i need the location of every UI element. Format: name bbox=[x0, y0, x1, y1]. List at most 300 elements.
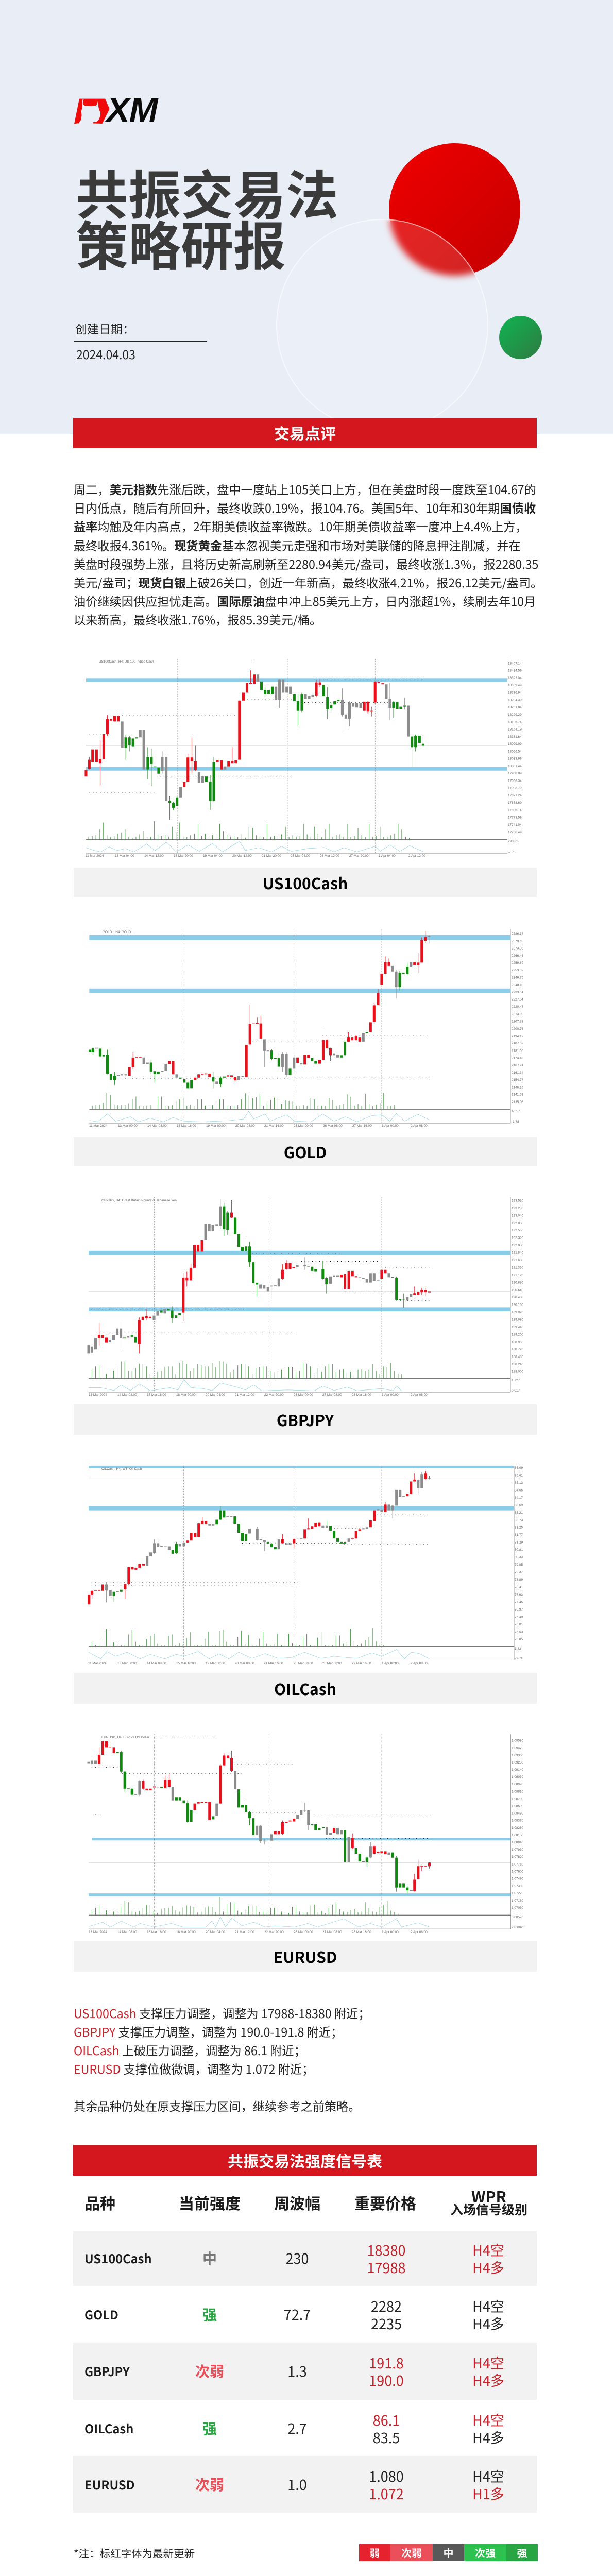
price axis labels: 2135.06 bbox=[512, 1100, 524, 1104]
price axis labels: 191.600 bbox=[512, 1259, 524, 1262]
time axis labels: 21 Mar 16:00 bbox=[264, 1662, 283, 1665]
price axis labels: 0.017 bbox=[512, 1389, 520, 1393]
price axis labels: 1.07160 bbox=[512, 1899, 524, 1903]
decorative red circle bbox=[389, 143, 520, 276]
price axis labels: 1.09360 bbox=[512, 1754, 524, 1757]
row: OILCash: 86.1 bbox=[373, 2410, 400, 2430]
chart title: GOLD_, H4: GOLD_ bbox=[103, 930, 133, 934]
row: US100Cash: 中 bbox=[202, 2248, 217, 2268]
price axis labels: 17773.59 bbox=[508, 816, 522, 820]
time axis labels: 11 Mar 2024 bbox=[88, 1662, 107, 1665]
row: GBPJPY: GBPJPY bbox=[84, 2362, 130, 2380]
price axis labels: 18261.84 bbox=[508, 706, 522, 709]
table header: 周波幅 bbox=[274, 2191, 320, 2214]
price axis labels: 2227.04 bbox=[512, 998, 524, 1002]
time axis labels: 19 Mar 00:00 bbox=[206, 1662, 225, 1665]
row: OILCash: 83.5 bbox=[373, 2427, 400, 2447]
section heading: trade review bbox=[73, 418, 537, 448]
row: OILCash: H4空 bbox=[472, 2410, 504, 2430]
time axis labels: 15 Mar 16:00 bbox=[177, 1124, 196, 1128]
row: OILCash: 2.7 bbox=[287, 2418, 307, 2438]
row: US100Cash: H4多 bbox=[472, 2257, 504, 2277]
strength legend bbox=[359, 2544, 538, 2561]
price axis labels: 80.33 bbox=[515, 1556, 523, 1560]
time axis labels: 25 Mar 00:00 bbox=[294, 1124, 313, 1128]
time axis labels: 28 Mar 16:00 bbox=[352, 1930, 371, 1934]
price plot bbox=[89, 1734, 511, 1929]
price axis labels: 2141.63 bbox=[512, 1093, 524, 1097]
price axis labels: -1.78 bbox=[512, 1120, 519, 1124]
table header bbox=[84, 2184, 527, 2218]
row: US100Cash bbox=[73, 2231, 537, 2286]
chart: GBPJPY candlesticks bbox=[88, 1197, 524, 1397]
time axis labels: 21 Mar 12:00 bbox=[235, 1930, 254, 1934]
price axis labels: 1.727 bbox=[512, 1379, 520, 1382]
price axis labels: 188.480 bbox=[512, 1355, 524, 1359]
time axis labels: 19 Mar 00:00 bbox=[206, 1124, 226, 1128]
price axis labels: 192.800 bbox=[512, 1222, 524, 1225]
price axis labels: 188.960 bbox=[512, 1341, 524, 1344]
price axis labels: 2240.18 bbox=[512, 984, 524, 987]
price axis labels: 1.07710 bbox=[512, 1862, 524, 1866]
price axis labels: 2194.19 bbox=[512, 1035, 524, 1038]
price axis labels: 18359.49 bbox=[508, 684, 522, 687]
time axis labels: 26 Mar 12:00 bbox=[320, 854, 339, 858]
row: GOLD bbox=[84, 2296, 504, 2333]
price axis labels: 193.280 bbox=[512, 1207, 524, 1210]
time axis labels: 11 Mar 2024 bbox=[89, 1124, 108, 1128]
price axis labels: 2161.34 bbox=[512, 1071, 524, 1075]
price axis labels: 1.07050 bbox=[512, 1906, 524, 1910]
price axis labels: 81.29 bbox=[515, 1541, 523, 1545]
price axis labels: 18229.29 bbox=[508, 713, 522, 717]
time axis labels: 27 Mar 16:00 bbox=[352, 1124, 372, 1128]
price axis labels: 1.08920 bbox=[512, 1783, 524, 1786]
price axis labels: 84.17 bbox=[515, 1496, 523, 1500]
price axis labels: 2148.20 bbox=[512, 1086, 524, 1089]
time axis labels: 26 Mar 08:00 bbox=[322, 1662, 342, 1665]
time axis labels: 14 Mar 08:00 bbox=[147, 1124, 167, 1128]
price axis labels: 18099.09 bbox=[508, 742, 522, 746]
price axis labels: 76.01 bbox=[515, 1623, 523, 1626]
price axis labels: 18326.94 bbox=[508, 691, 522, 694]
time axis labels: 13 Mar 00:00 bbox=[117, 1662, 137, 1665]
price axis labels: 2207.33 bbox=[512, 1020, 524, 1024]
row: OILCash: 强 bbox=[202, 2418, 217, 2438]
time axis labels: 2 Apr 08:00 bbox=[411, 1930, 428, 1934]
price plot bbox=[89, 1197, 510, 1392]
row: EURUSD bbox=[73, 2456, 537, 2513]
chart: GOLD candlesticks bbox=[89, 929, 524, 1128]
price axis labels: 192.320 bbox=[512, 1236, 524, 1240]
price axis labels: 17806.14 bbox=[508, 808, 522, 812]
price axis labels: 18131.64 bbox=[508, 735, 522, 739]
time axis labels: 27 Mar 16:00 bbox=[352, 1662, 371, 1665]
strength legend: 强 bbox=[517, 2545, 527, 2560]
price axis labels: 83.21 bbox=[515, 1511, 523, 1515]
price axis labels: 190.880 bbox=[512, 1281, 524, 1284]
price axis labels: 2266.46 bbox=[512, 954, 524, 958]
instrument label: US100Cash bbox=[74, 868, 537, 897]
price axis labels: 17968.89 bbox=[508, 772, 522, 775]
price plot bbox=[89, 1466, 514, 1660]
row: OILCash bbox=[84, 2410, 504, 2447]
time axis labels: 13 Mar 00:00 bbox=[118, 1124, 138, 1128]
market commentary text: 周二，美元指数先涨后跌，盘中一度站上105关口上方，但在美盘时段一度跌至104.67的 bbox=[74, 480, 536, 498]
price axis labels: 0.00576 bbox=[512, 1916, 524, 1919]
price axis labels: 18424.59 bbox=[508, 669, 522, 673]
time axis labels: 1 Apr 00:00 bbox=[382, 1124, 399, 1128]
price axis labels: 2273.03 bbox=[512, 947, 524, 951]
price axis labels: 2253.32 bbox=[512, 969, 524, 972]
support and resistance updates: US100Cash 支撑压力调整，调整为 17988-18380 附近； bbox=[74, 2004, 370, 2022]
price axis labels: 17708.49 bbox=[508, 831, 522, 834]
price axis labels: 17936.34 bbox=[508, 779, 522, 783]
time axis labels: 1 Apr 00:00 bbox=[382, 1662, 399, 1665]
time axis labels: 1 Apr 00:00 bbox=[382, 1930, 399, 1934]
time axis labels: 14 Mar 12:00 bbox=[144, 854, 164, 858]
time axis labels: 19 Mar 04:00 bbox=[203, 854, 223, 858]
support and resistance updates: EURUSD 支撑位做微调，调整为 1.072 附近； bbox=[74, 2060, 314, 2077]
chart title: EURUSD, H4: Euro vs US Dollar bbox=[101, 1736, 150, 1739]
time axis labels: 22 Mar 20:00 bbox=[264, 1930, 284, 1934]
row: GOLD: H4多 bbox=[472, 2313, 504, 2333]
price axis labels: 189.200 bbox=[512, 1333, 524, 1336]
price axis labels: 1.07600 bbox=[512, 1870, 524, 1873]
price axis labels: 86.09 bbox=[515, 1466, 523, 1470]
table header: 当前强度 bbox=[179, 2191, 241, 2214]
title: 共振交易法 bbox=[76, 154, 338, 230]
time axis labels: 26 Mar 08:00 bbox=[323, 1124, 343, 1128]
price axis labels: 81.77 bbox=[515, 1533, 523, 1537]
price axis labels: 1.07270 bbox=[512, 1892, 524, 1895]
price axis labels: 1.08040 bbox=[512, 1841, 524, 1844]
chart: EURUSD candlesticks bbox=[88, 1734, 525, 1934]
price axis labels: 79.37 bbox=[515, 1571, 523, 1574]
price axis labels: 1.07490 bbox=[512, 1877, 524, 1880]
price axis labels: 2213.90 bbox=[512, 1012, 524, 1016]
instrument label: EURUSD: EURUSD bbox=[274, 1945, 337, 1968]
market commentary text: 益率均触及年内高点，2年期美债收益率微跌。10年期美债收益率一度冲上4.4%上方， bbox=[74, 517, 527, 535]
row: US100Cash: 230 bbox=[286, 2248, 309, 2268]
price axis labels: 85.61 bbox=[515, 1473, 523, 1477]
row: GBPJPY: 次弱 bbox=[195, 2361, 224, 2381]
market commentary text bbox=[74, 480, 542, 628]
price axis labels: 78.41 bbox=[515, 1585, 523, 1589]
instrument label: EURUSD bbox=[74, 1941, 537, 1972]
time axis labels: 28 Mar 16:00 bbox=[352, 1393, 371, 1397]
time axis labels: 2 Apr 08:00 bbox=[411, 1662, 428, 1665]
decorative green circle bbox=[499, 316, 542, 359]
price axis labels: 1.08810 bbox=[512, 1790, 524, 1793]
time axis labels: 2 Apr 08:00 bbox=[411, 1124, 428, 1128]
table header: 品种 bbox=[84, 2191, 115, 2214]
row: GBPJPY bbox=[73, 2343, 537, 2400]
signal strength table bbox=[73, 2184, 537, 2513]
header background bbox=[0, 0, 613, 434]
time axis labels: 26 Mar 00:00 bbox=[294, 1930, 313, 1934]
row: GOLD: 2235 bbox=[371, 2313, 402, 2333]
time axis labels: 20 Mar 08:00 bbox=[235, 1662, 254, 1665]
time axis labels: 21 Mar 16:00 bbox=[264, 1124, 284, 1128]
price axis labels: 2181.05 bbox=[512, 1049, 524, 1053]
time axis labels: 13 Mar 04:00 bbox=[115, 854, 134, 858]
price axis labels: 1.07820 bbox=[512, 1855, 524, 1859]
price axis labels: 2200.76 bbox=[512, 1027, 524, 1031]
row: GBPJPY: 1.3 bbox=[287, 2361, 307, 2381]
price axis labels: 1.09030 bbox=[512, 1775, 524, 1779]
time axis labels: 26 Mar 00:00 bbox=[294, 1393, 313, 1397]
row: GOLD: H4空 bbox=[472, 2296, 504, 2316]
time axis labels: 25 Mar 00:00 bbox=[294, 1662, 313, 1665]
time axis labels: 20 Mar 12:00 bbox=[232, 854, 252, 858]
time axis labels: 21 Mar 12:00 bbox=[235, 1393, 254, 1397]
price axis labels: 191.120 bbox=[512, 1274, 524, 1277]
section heading: trade review: 交易点评 bbox=[274, 421, 336, 444]
row: OILCash: OILCash bbox=[84, 2419, 133, 2437]
strength legend: 次强 bbox=[475, 2545, 496, 2560]
price axis labels: 2167.91 bbox=[512, 1064, 524, 1067]
price plot bbox=[89, 929, 510, 1123]
row: OILCash: H4多 bbox=[472, 2427, 504, 2447]
price axis labels: 1.09580 bbox=[512, 1739, 524, 1743]
time axis labels: 18 Mar 20:00 bbox=[176, 1393, 196, 1397]
creation date label: 创建日期： bbox=[75, 319, 134, 337]
time axis labels: 14 Mar 08:00 bbox=[117, 1930, 137, 1934]
support and resistance updates: GBPJPY 支撑压力调整，调整为 190.0-191.8 附近； bbox=[74, 2023, 343, 2040]
price axis labels: 190.160 bbox=[512, 1303, 524, 1307]
chart: OILCash candlesticks bbox=[88, 1465, 523, 1665]
table footnote: *注：标红字体为最新更新 bbox=[74, 2545, 195, 2561]
price axis labels: 18001.44 bbox=[508, 765, 522, 768]
chart: US100Cash candlesticks bbox=[84, 659, 522, 858]
price axis labels: -7.75 bbox=[508, 851, 516, 854]
row: GBPJPY: H4多 bbox=[472, 2370, 504, 2390]
time axis labels: 15 Mar 16:00 bbox=[147, 1393, 166, 1397]
price axis labels: 80.81 bbox=[515, 1548, 523, 1552]
instrument label: OILCash: OILCash bbox=[274, 1677, 336, 1700]
price axis labels: 193.520 bbox=[512, 1199, 524, 1202]
price axis labels: 18457.14 bbox=[508, 662, 522, 665]
support and resistance updates bbox=[74, 2004, 370, 2077]
price axis labels: 17903.79 bbox=[508, 787, 522, 790]
price axis labels: 84.65 bbox=[515, 1488, 523, 1492]
price axis labels: 192.080 bbox=[512, 1244, 524, 1247]
row: GOLD: 2282 bbox=[371, 2296, 402, 2316]
price axis labels: 1.07380 bbox=[512, 1885, 524, 1888]
market commentary text: 以来新高，最终收涨1.76%，报85.39美元/桶。 bbox=[74, 611, 321, 628]
price axis labels: 77.93 bbox=[515, 1593, 523, 1597]
time axis labels: 13 Mar 2024 bbox=[89, 1930, 107, 1934]
instrument label: OILCash bbox=[74, 1673, 537, 1704]
market commentary text: 日内低点，随后有所回升，最终收跌0.19%，报104.76。美国5年、10年和30年期国债收 bbox=[74, 499, 536, 516]
row: EURUSD: 1.072 bbox=[369, 2483, 404, 2503]
title: 策略研报 bbox=[76, 205, 286, 281]
price axis labels: 75.05 bbox=[515, 1638, 523, 1641]
support and resistance updates: OILCash 上破压力调整，调整为 86.1 附近； bbox=[74, 2041, 306, 2059]
row: EURUSD: 1.080 bbox=[369, 2466, 404, 2486]
row: EURUSD: 次弱 bbox=[195, 2474, 224, 2495]
row: US100Cash: H4空 bbox=[472, 2240, 504, 2260]
instrument label: GBPJPY bbox=[74, 1404, 537, 1435]
logo: XM: XM bbox=[107, 91, 158, 129]
chart title: OILCash, H4: WTI Oil Cash bbox=[101, 1467, 142, 1471]
price axis labels: 1.08700 bbox=[512, 1797, 524, 1801]
row: US100Cash: 18380 bbox=[367, 2240, 405, 2260]
price axis labels: 188.000 bbox=[512, 1370, 524, 1374]
price axis labels: 83.69 bbox=[515, 1503, 523, 1507]
row: US100Cash: US100Cash bbox=[84, 2249, 152, 2267]
time axis labels: 15 Mar 16:00 bbox=[147, 1930, 166, 1934]
chart title: GBPJPY, H4: Great Britain Pound vs Japanese Yen bbox=[101, 1199, 177, 1202]
time axis labels: 22 Mar 20:00 bbox=[264, 1393, 284, 1397]
row: GOLD: GOLD bbox=[84, 2306, 118, 2323]
market commentary text: 油价继续因供应担忧走高。国际原油盘中冲上85美元上方，日内涨超1%，续刷去年10月 bbox=[74, 592, 536, 609]
price axis labels: 188.240 bbox=[512, 1363, 524, 1366]
price axis labels: 189.920 bbox=[512, 1311, 524, 1314]
time axis labels: 21 Mar 20:00 bbox=[262, 854, 281, 858]
time axis labels: 13 Mar 2024 bbox=[89, 1393, 107, 1397]
price axis labels: 40.17 bbox=[512, 1110, 520, 1113]
instrument label: GBPJPY: GBPJPY bbox=[277, 1408, 334, 1431]
price axis labels: 1.83 bbox=[515, 1647, 521, 1651]
time axis labels: 1 Apr 00:00 bbox=[382, 1393, 399, 1397]
chart title: US100Cash, H4: US 100 Indice Cash bbox=[99, 660, 154, 664]
time axis labels: 18 Mar 20:00 bbox=[176, 1930, 196, 1934]
time axis labels: 20 Mar 08:00 bbox=[235, 1124, 255, 1128]
remaining instruments note: 其余品种仍处在原支撑压力区间，继续参考之前策略。 bbox=[74, 2097, 361, 2114]
price axis labels: 77.45 bbox=[515, 1600, 523, 1604]
time axis labels: 2 Apr 12:00 bbox=[408, 854, 425, 858]
price axis labels: 17871.24 bbox=[508, 794, 522, 798]
price axis labels: 2279.60 bbox=[512, 939, 524, 943]
price axis labels: 1.09470 bbox=[512, 1747, 524, 1750]
time axis labels: 27 Mar 08:00 bbox=[322, 1930, 342, 1934]
price axis labels: 191.360 bbox=[512, 1266, 524, 1269]
row: GOLD: 72.7 bbox=[284, 2304, 311, 2324]
row: EURUSD: EURUSD bbox=[84, 2476, 135, 2493]
logo: XM bbox=[74, 91, 159, 129]
time axis labels: 20 Mar 04:00 bbox=[206, 1930, 225, 1934]
strength legend: 弱 bbox=[370, 2545, 380, 2560]
price axis labels: 293.31 bbox=[508, 840, 518, 843]
row: EURUSD: 1.0 bbox=[287, 2474, 307, 2494]
price axis labels: 2246.75 bbox=[512, 976, 524, 979]
row: US100Cash: 17988 bbox=[367, 2257, 405, 2277]
market commentary text: 最终收报4.361%。现货黄金基本忽视美元走强和市场对美联储的降息押注削减，并在 bbox=[74, 536, 521, 554]
price axis labels: 2233.61 bbox=[512, 991, 524, 994]
price axis labels: 2187.62 bbox=[512, 1042, 524, 1045]
price axis labels: 18196.74 bbox=[508, 720, 522, 724]
instrument label: US100Cash: US100Cash bbox=[263, 871, 348, 894]
price axis labels: 190.640 bbox=[512, 1289, 524, 1292]
price axis labels: 78.89 bbox=[515, 1578, 523, 1582]
price axis labels: 1.08590 bbox=[512, 1804, 524, 1808]
table header: 入场信号级别 bbox=[450, 2200, 527, 2218]
price axis labels: 17838.69 bbox=[508, 801, 522, 805]
price axis labels: 18392.04 bbox=[508, 676, 522, 680]
table header: WPR bbox=[471, 2184, 506, 2207]
section heading: signal table: 共振交易法强度信号表 bbox=[228, 2149, 382, 2172]
price axis labels: 85.13 bbox=[515, 1481, 523, 1485]
price axis labels: 2286.17 bbox=[512, 932, 524, 936]
decorative glass circle bbox=[276, 219, 488, 431]
price axis labels: -0.00026 bbox=[512, 1926, 525, 1929]
time axis labels: 27 Mar 20:00 bbox=[349, 854, 369, 858]
price axis labels: 192.560 bbox=[512, 1229, 524, 1232]
price axis labels: 190.400 bbox=[512, 1296, 524, 1299]
time axis labels: 14 Mar 08:00 bbox=[117, 1393, 137, 1397]
table header: 重要价格 bbox=[354, 2191, 416, 2214]
row: GBPJPY: 190.0 bbox=[369, 2370, 404, 2390]
price axis labels: 18164.19 bbox=[508, 728, 522, 732]
time axis labels: 15 Mar 20:00 bbox=[174, 854, 193, 858]
price axis labels: 1.08260 bbox=[512, 1826, 524, 1830]
market commentary text: 美盘时段强势上涨，且将历史新高刷新至2280.94美元/盎司，最终收涨1.3%，报2280.35 bbox=[74, 555, 538, 572]
date value: 2024.04.03 bbox=[76, 345, 135, 363]
price axis labels: 189.440 bbox=[512, 1326, 524, 1329]
price axis labels: 18294.39 bbox=[508, 699, 522, 702]
price axis labels: 82.73 bbox=[515, 1518, 523, 1522]
price axis labels: 2174.48 bbox=[512, 1057, 524, 1060]
price axis labels: -0.03 bbox=[515, 1657, 522, 1660]
price axis labels: 2220.47 bbox=[512, 1005, 524, 1009]
time axis labels: 1 Apr 04:00 bbox=[379, 854, 396, 858]
price axis labels: 2154.77 bbox=[512, 1078, 524, 1082]
price axis labels: 2259.89 bbox=[512, 961, 524, 965]
instrument label: GOLD bbox=[74, 1137, 537, 1166]
price axis labels: 76.49 bbox=[515, 1615, 523, 1619]
price axis labels: 17741.04 bbox=[508, 823, 522, 827]
price axis labels: 1.08370 bbox=[512, 1819, 524, 1823]
row: EURUSD: H4空 bbox=[472, 2466, 504, 2486]
time axis labels: 14 Mar 08:00 bbox=[147, 1662, 166, 1665]
price axis labels: 189.680 bbox=[512, 1318, 524, 1321]
time axis labels: 25 Mar 04:00 bbox=[291, 854, 310, 858]
instrument label: GOLD: GOLD bbox=[284, 1140, 327, 1163]
price axis labels: 1.08480 bbox=[512, 1812, 524, 1816]
price axis labels: 18033.99 bbox=[508, 757, 522, 761]
row: GOLD: 强 bbox=[202, 2304, 217, 2325]
price axis labels: 1.08150 bbox=[512, 1834, 524, 1837]
time axis labels: 20 Mar 04:00 bbox=[206, 1393, 225, 1397]
price axis labels: 75.53 bbox=[515, 1630, 523, 1634]
time axis labels: 15 Mar 16:00 bbox=[176, 1662, 196, 1665]
price axis labels: 18066.54 bbox=[508, 750, 522, 753]
price plot bbox=[86, 659, 507, 853]
price axis labels: 79.85 bbox=[515, 1563, 523, 1567]
time axis labels: 27 Mar 08:00 bbox=[322, 1393, 342, 1397]
section heading: signal table bbox=[73, 2145, 537, 2176]
market commentary text: 美元/盎司；现货白银上破26关口，创近一年新高，最终收涨4.21%，报26.12美元/盎司。 bbox=[74, 573, 542, 591]
price axis labels: 1.09250 bbox=[512, 1761, 524, 1765]
strength legend: 次弱 bbox=[401, 2545, 422, 2560]
row: EURUSD: H1多 bbox=[472, 2483, 504, 2503]
price axis labels: 76.97 bbox=[515, 1608, 523, 1612]
time axis labels: 11 Mar 2024 bbox=[86, 854, 104, 858]
row: GBPJPY: H4空 bbox=[472, 2352, 504, 2372]
strength legend: 中 bbox=[443, 2545, 453, 2560]
price axis labels: 188.720 bbox=[512, 1348, 524, 1351]
time axis labels: 2 Apr 08:00 bbox=[411, 1393, 428, 1397]
price axis labels: 193.040 bbox=[512, 1214, 524, 1217]
title bbox=[76, 154, 338, 281]
price axis labels: 82.25 bbox=[515, 1526, 523, 1530]
date underline bbox=[74, 341, 207, 342]
row: GBPJPY: 191.8 bbox=[369, 2352, 404, 2372]
price axis labels: 1.09140 bbox=[512, 1768, 524, 1772]
price axis labels: 191.840 bbox=[512, 1251, 524, 1255]
